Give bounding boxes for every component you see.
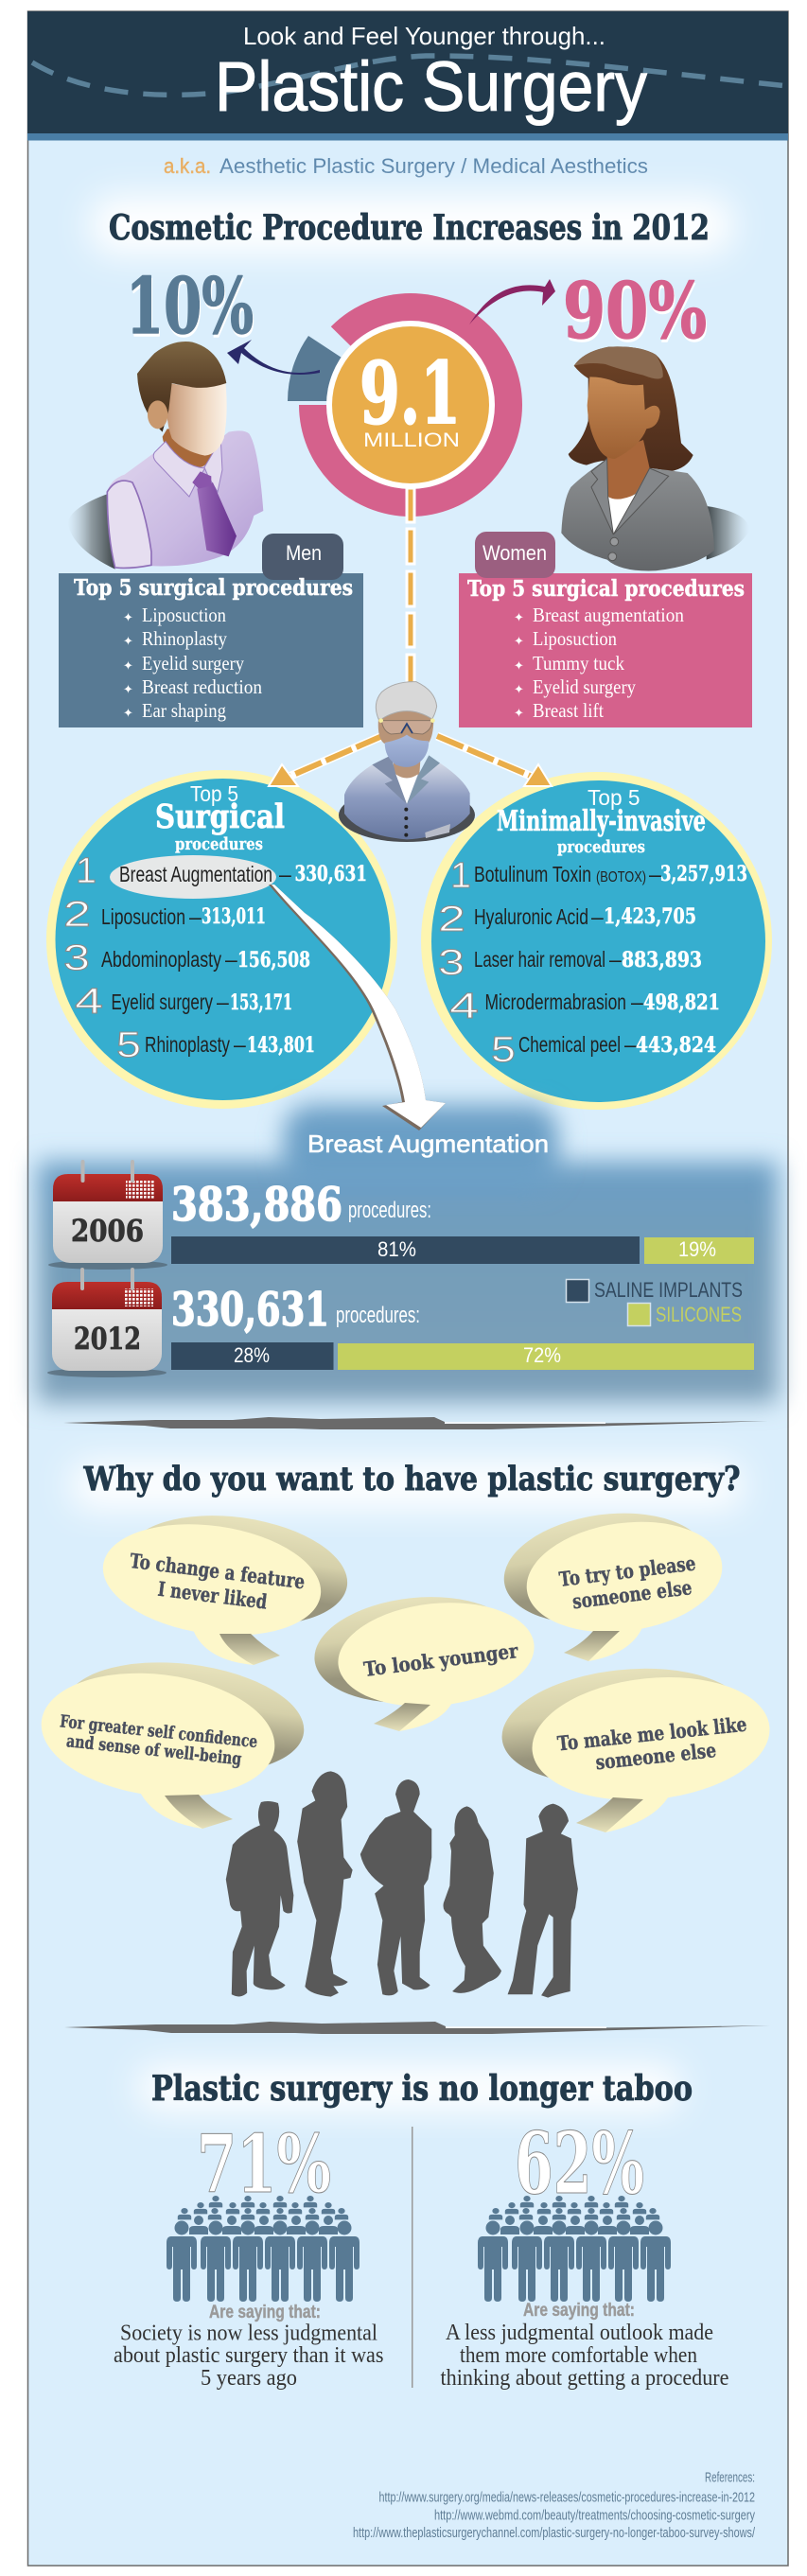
total number: 9.1 xyxy=(360,343,461,444)
panel: breast augmentation background xyxy=(38,1105,778,1402)
procedure list: Rhinoplasty xyxy=(142,627,227,650)
row 5 xyxy=(491,1030,716,1070)
connector: dashed line donut to doctor xyxy=(407,488,414,685)
ellipse heading: procedures xyxy=(557,837,645,857)
procedure list: ✦ xyxy=(123,634,133,648)
million label: MILLION xyxy=(363,429,460,451)
row 2: 2 xyxy=(438,900,465,939)
row 5 xyxy=(116,1025,315,1065)
row 5: 143,801 xyxy=(247,1033,315,1058)
row 2: 1,423,705 xyxy=(604,904,696,929)
statement xyxy=(441,2321,728,2391)
row 4: 4 xyxy=(75,982,103,1022)
ellipse heading: Minimally-invasive xyxy=(497,805,706,838)
row 4 xyxy=(449,987,720,1026)
row 2: – xyxy=(591,904,604,929)
row 3: 3 xyxy=(63,938,90,978)
ellipse heading xyxy=(155,781,285,854)
panel: right ellipse minimally invasive procedures xyxy=(421,772,772,1110)
bar chart: 2006 split: 19% xyxy=(678,1237,716,1261)
row 3: 3 xyxy=(438,943,465,983)
stat: 62% xyxy=(441,2113,728,2391)
procedure list: Tummy tuck xyxy=(533,652,624,675)
procedure list: Liposuction xyxy=(142,604,226,626)
speech bubble: please someone else: To try to please xyxy=(558,1551,697,1591)
procedure list: ✦ xyxy=(514,610,524,624)
arrow: to women xyxy=(469,279,555,324)
stat: 2012 procedures: 330,631 xyxy=(171,1282,329,1337)
procedure list: ✦ xyxy=(123,682,133,696)
legend: SALINE IMPLANTS xyxy=(594,1278,743,1302)
ellipse heading: Top 5 xyxy=(190,781,238,806)
header banner xyxy=(27,11,788,140)
row 4: Microdermabrasion xyxy=(484,990,626,1014)
row 1: 1 xyxy=(76,851,96,891)
row 1 xyxy=(450,856,747,896)
bar chart: 2006 split: 81% xyxy=(377,1237,416,1261)
references xyxy=(353,2469,756,2541)
row 5: 443,824 xyxy=(636,1033,716,1058)
statement: Society is now less judgmental xyxy=(120,2322,377,2346)
ellipse heading xyxy=(497,785,706,857)
panel: women top 5 surgical xyxy=(459,532,752,727)
procedure list: ✦ xyxy=(514,634,524,648)
row 5: – xyxy=(624,1032,637,1057)
speech bubble: please someone else: someone else xyxy=(571,1575,693,1613)
row 1: Botulinum Toxin xyxy=(474,862,591,886)
bar chart: 2012 split xyxy=(171,1342,754,1370)
icon: man xyxy=(68,342,263,570)
subtitle: a.k.a. xyxy=(164,154,211,178)
row 1: Breast Augmentation xyxy=(119,862,272,886)
tag: men: Men xyxy=(286,541,322,565)
tag: men xyxy=(262,534,343,580)
row 1: 330,631 xyxy=(295,862,367,886)
label: Are saying that: xyxy=(209,2303,321,2322)
subtitle: Aesthetic Plastic Surgery / Medical Aesthetics xyxy=(219,154,648,178)
procedure list: Breast lift xyxy=(533,699,604,722)
stat: 2012 procedures: procedures: xyxy=(336,1303,420,1328)
heading: breast augmentation: Breast Augmentation xyxy=(307,1130,549,1158)
speech bubble: look younger xyxy=(309,1587,539,1731)
highlight ellipse xyxy=(110,855,276,899)
procedure list xyxy=(514,604,684,722)
procedure list: Ear shaping xyxy=(142,699,226,722)
ellipse heading: Surgical xyxy=(155,797,285,836)
row 5: Chemical peel xyxy=(518,1032,621,1057)
panel heading: Top 5 surgical procedures xyxy=(467,576,745,602)
row 1: – xyxy=(279,862,291,886)
row 1: 1 xyxy=(450,856,471,896)
stat: 71%: 71% xyxy=(197,2117,331,2211)
references: References: xyxy=(705,2469,755,2486)
ellipse heading: procedures xyxy=(175,834,263,854)
speech bubble: change a feature: I never liked xyxy=(157,1577,269,1614)
speech bubble: self confidence: and sense of well-being xyxy=(65,1731,243,1770)
row 3: – xyxy=(225,947,237,972)
donut chart: 9.1 million xyxy=(280,293,522,517)
calendar: 2012: 2012 xyxy=(74,1321,141,1357)
row 3: 883,893 xyxy=(622,948,702,973)
stat: 10% men: 10% xyxy=(126,262,254,352)
row 4: – xyxy=(631,990,643,1014)
heading: no longer taboo: Plastic surgery is no longer taboo xyxy=(151,2069,693,2109)
speech bubble: please someone else xyxy=(497,1501,729,1661)
kicker: Look and Feel Younger through... xyxy=(243,22,605,50)
procedure list: Eyelid surgery xyxy=(142,652,244,675)
speech bubble: change a feature xyxy=(96,1502,355,1665)
procedure list: ✦ xyxy=(514,706,524,720)
statement xyxy=(114,2322,384,2391)
curved arrow: breast augmentation to detail xyxy=(269,885,446,1130)
procedure list: ✦ xyxy=(514,682,524,696)
arrow: to men xyxy=(227,340,320,375)
procedure list: ✦ xyxy=(514,658,524,673)
procedure list: Breast reduction xyxy=(142,675,262,698)
row 3 xyxy=(438,943,702,983)
procedure list: Breast augmentation xyxy=(533,604,684,626)
row 1: (BOTOX) xyxy=(596,869,646,885)
speech bubble: look like someone else: someone else xyxy=(594,1738,717,1774)
row 5: – xyxy=(234,1032,246,1057)
arrows: doctor to ellipses xyxy=(269,736,552,786)
calendar: 2006 xyxy=(48,1160,167,1270)
speech bubble: look younger: To look younger xyxy=(362,1638,520,1681)
row 3: Laser hair removal xyxy=(474,947,605,972)
row 5: 5 xyxy=(116,1025,141,1065)
stat: 2006 procedures: 383,886 xyxy=(171,1177,342,1232)
statement: thinking about getting a procedure xyxy=(441,2366,728,2391)
tag: women xyxy=(475,532,555,578)
stat: 62%: 62% xyxy=(515,2113,644,2214)
bar chart: 2012 split: 72% xyxy=(523,1343,561,1367)
main title: Plastic Surgery xyxy=(215,47,647,126)
row 1: 3,257,913 xyxy=(660,862,747,886)
row 4: 153,171 xyxy=(230,990,292,1015)
procedure list: ✦ xyxy=(123,658,133,673)
bar chart: 2006 split xyxy=(171,1236,754,1264)
row 4: Eyelid surgery xyxy=(112,990,213,1014)
calendar: 2012 xyxy=(47,1268,167,1377)
stat: 71% xyxy=(114,2117,384,2391)
calendar: 2006: 2006 xyxy=(71,1213,144,1249)
panel: men top 5 surgical xyxy=(59,534,363,727)
row 1 xyxy=(76,851,367,891)
stat: 2006 procedures: procedures: xyxy=(348,1198,431,1223)
row 3: 156,508 xyxy=(237,948,310,973)
silhouettes: group of people xyxy=(226,1771,578,1998)
speech bubble: look like someone else: To make me look like xyxy=(556,1712,747,1755)
statement: A less judgmental outlook made xyxy=(446,2321,713,2345)
row 3: Abdominoplasty xyxy=(101,947,221,972)
row 1: – xyxy=(649,862,661,886)
row 2: 2 xyxy=(63,895,91,935)
row 3: – xyxy=(609,947,622,972)
statement: 5 years ago xyxy=(201,2366,297,2391)
procedure list: Eyelid surgery xyxy=(533,675,636,698)
procedure list: Liposuction xyxy=(533,627,617,650)
tag: women: Women xyxy=(482,541,547,565)
procedure list: ✦ xyxy=(123,610,133,624)
speech bubble: look like someone else xyxy=(496,1657,776,1832)
bar chart: 2012 split: 28% xyxy=(234,1343,270,1367)
row 4 xyxy=(75,982,292,1022)
procedure list: ✦ xyxy=(123,706,133,720)
row 2: 313,011 xyxy=(202,904,266,929)
row 2: – xyxy=(189,904,202,929)
row 4: 4 xyxy=(449,987,479,1026)
panel heading: Top 5 surgical procedures xyxy=(74,575,353,601)
icon: woman xyxy=(561,346,749,570)
row 2: Hyaluronic Acid xyxy=(474,904,588,929)
label: Are saying that: xyxy=(523,2301,635,2321)
speech bubble: change a feature: To change a feature xyxy=(129,1549,307,1593)
heading: cosmetic procedure increases xyxy=(90,196,733,254)
legend xyxy=(566,1278,743,1326)
row 2: Liposuction xyxy=(101,904,185,929)
statement: about plastic surgery than it was xyxy=(114,2343,384,2368)
row 4: – xyxy=(217,990,229,1014)
row 4: 498,821 xyxy=(643,990,720,1015)
legend: SILICONES xyxy=(656,1303,742,1326)
row 5: 5 xyxy=(491,1030,516,1070)
statement: them more comfortable when xyxy=(460,2343,697,2368)
procedure list xyxy=(123,604,262,722)
icon: crowd 71% xyxy=(167,2196,360,2302)
row 5: Rhinoplasty xyxy=(145,1032,230,1057)
icon: doctor xyxy=(339,682,475,842)
stat: 90% women: 90% xyxy=(563,267,707,357)
speech bubble: self confidence xyxy=(34,1650,310,1829)
panel: left ellipse surgical procedures xyxy=(46,770,397,1109)
row 3 xyxy=(63,938,310,978)
speech bubble: self confidence: For greater self confidence xyxy=(59,1711,258,1752)
ellipse heading: Top 5 xyxy=(588,785,640,810)
row 2 xyxy=(438,900,696,939)
icon: crowd 62% xyxy=(478,2196,671,2302)
row 2 xyxy=(63,895,266,935)
